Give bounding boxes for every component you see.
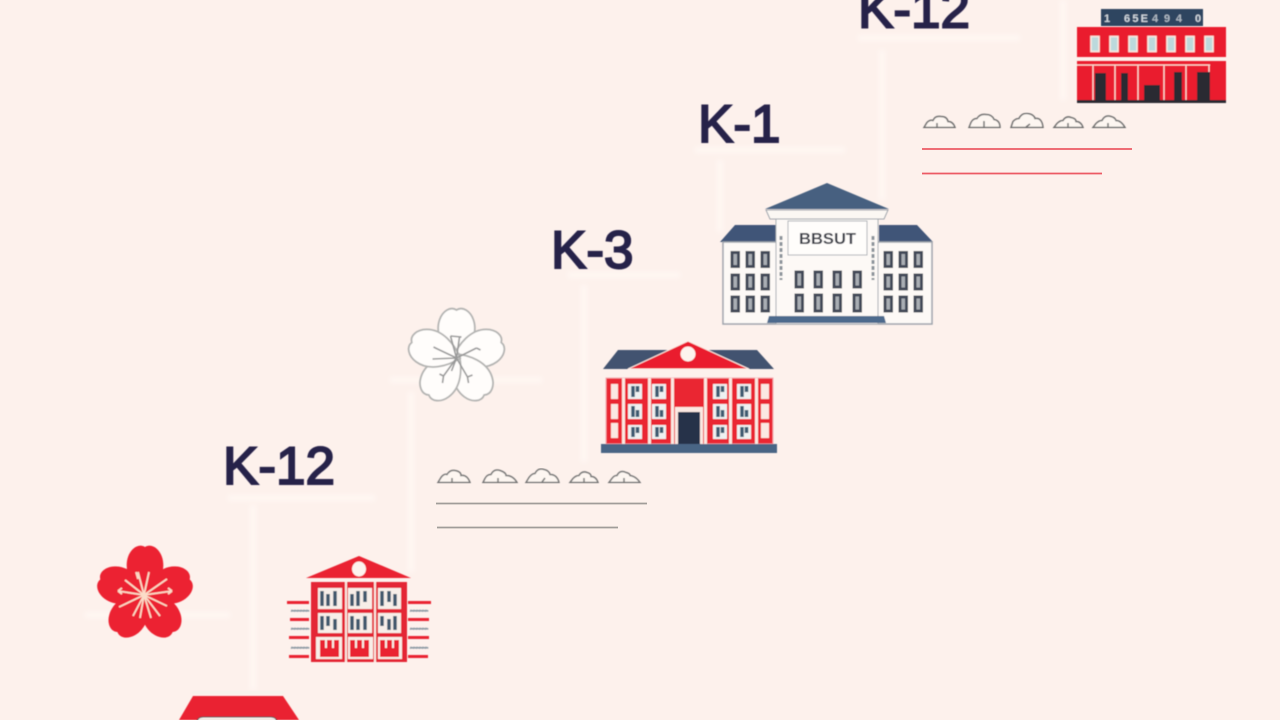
icon: white and blue school building [720,183,933,324]
icon: row of outline clouds (middle) [438,469,640,482]
icon: red building with dark sign (top right): 494 [1152,13,1183,25]
icon: red blossom [93,546,197,644]
icon: red building with dark sign (top right): 1 [1104,13,1110,25]
heading: K-3: K-3 [551,221,633,280]
text placeholder: grey lines (middle) [436,504,647,528]
icon: red building with dark sign (top right) [1077,9,1226,103]
icon: red building with dark sign (top right): 0 [1195,13,1201,25]
icon: red school with striped wings [287,556,431,662]
icon: white and blue school building: BBSUT [799,231,856,248]
icon: red school with blue roof [601,341,777,453]
icon: cropped red building at bottom [179,691,299,720]
heading: K-1: K-1 [698,95,780,154]
icon: row of outline clouds (top) [924,113,1125,128]
icon: red building with dark sign (top right): 65E [1124,13,1148,25]
icon: outline white blossom [405,309,508,407]
heading: K-12 lower: K-12 [223,437,335,496]
text placeholder: red lines (top) [922,149,1132,174]
